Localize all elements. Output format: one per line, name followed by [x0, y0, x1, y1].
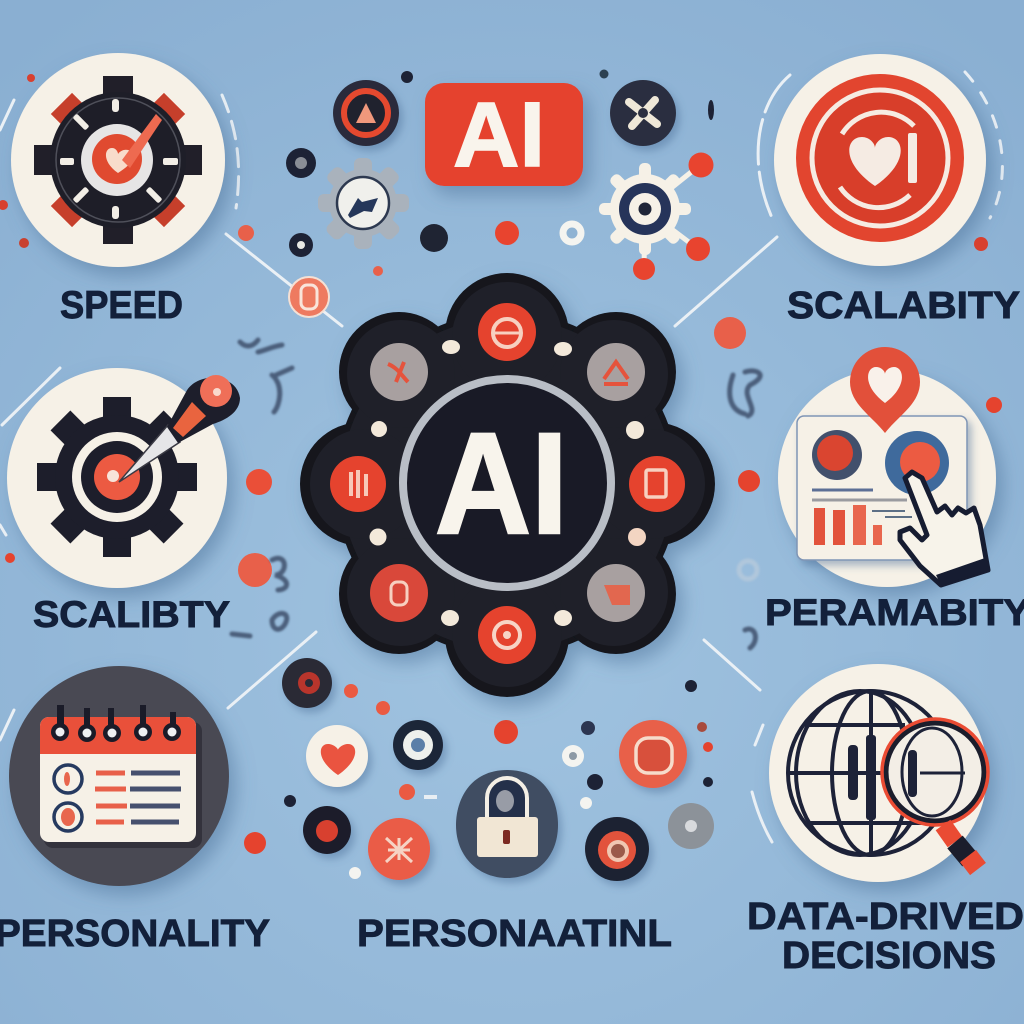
scattered dots and smudges — [0, 74, 1002, 879]
label: peramabity: PERAMABITY — [765, 592, 1024, 633]
panel: scalability top right — [774, 54, 1020, 327]
icon: heart target — [774, 54, 986, 266]
label: speed: SPEED — [60, 284, 183, 327]
badge: AI top — [425, 83, 583, 186]
ring dots — [370, 340, 646, 626]
label: scalibty: SCALIBTY — [33, 594, 230, 635]
icon: top cluster — [238, 70, 714, 317]
label: personality: PERSONALITY — [0, 913, 270, 955]
label: personaatinl: PERSONAATINL — [357, 913, 672, 955]
inner ring — [403, 379, 611, 587]
flower shape — [300, 273, 715, 697]
icon: speed gear and target — [11, 53, 225, 267]
center label: AI — [435, 403, 568, 564]
panel: data-driven decisions — [747, 664, 1024, 977]
label: scalability: SCALABITY — [787, 285, 1020, 327]
central AI badge — [300, 273, 715, 697]
badge: AI top: AI — [453, 84, 545, 186]
icon: small badges — [282, 658, 714, 881]
panel: personalization icons — [282, 658, 714, 955]
icon: padlock — [456, 770, 558, 878]
icon: heart badge — [306, 725, 368, 787]
label: data-driven decisions: DATA-DRIVED — [747, 896, 1024, 938]
flower inner face — [310, 282, 705, 687]
icon: globe and magnifier — [769, 664, 988, 882]
panel: scalibty left — [7, 368, 240, 635]
icon: heart pin — [850, 347, 920, 433]
gear white — [599, 163, 700, 269]
icon: gear with dart — [7, 368, 240, 588]
label: data-driven decisions: DECISIONS — [782, 935, 996, 977]
panel: peramabity — [765, 347, 1024, 633]
icon: dashboard with pointer — [778, 347, 996, 587]
badge: cross — [610, 80, 676, 146]
icon: calendar — [9, 666, 229, 886]
connector lines — [0, 72, 1002, 842]
panel: personality — [0, 666, 270, 955]
gear grey — [318, 158, 409, 249]
badge: warning — [333, 80, 399, 146]
node icons — [330, 303, 685, 664]
panel: speed — [11, 53, 225, 327]
